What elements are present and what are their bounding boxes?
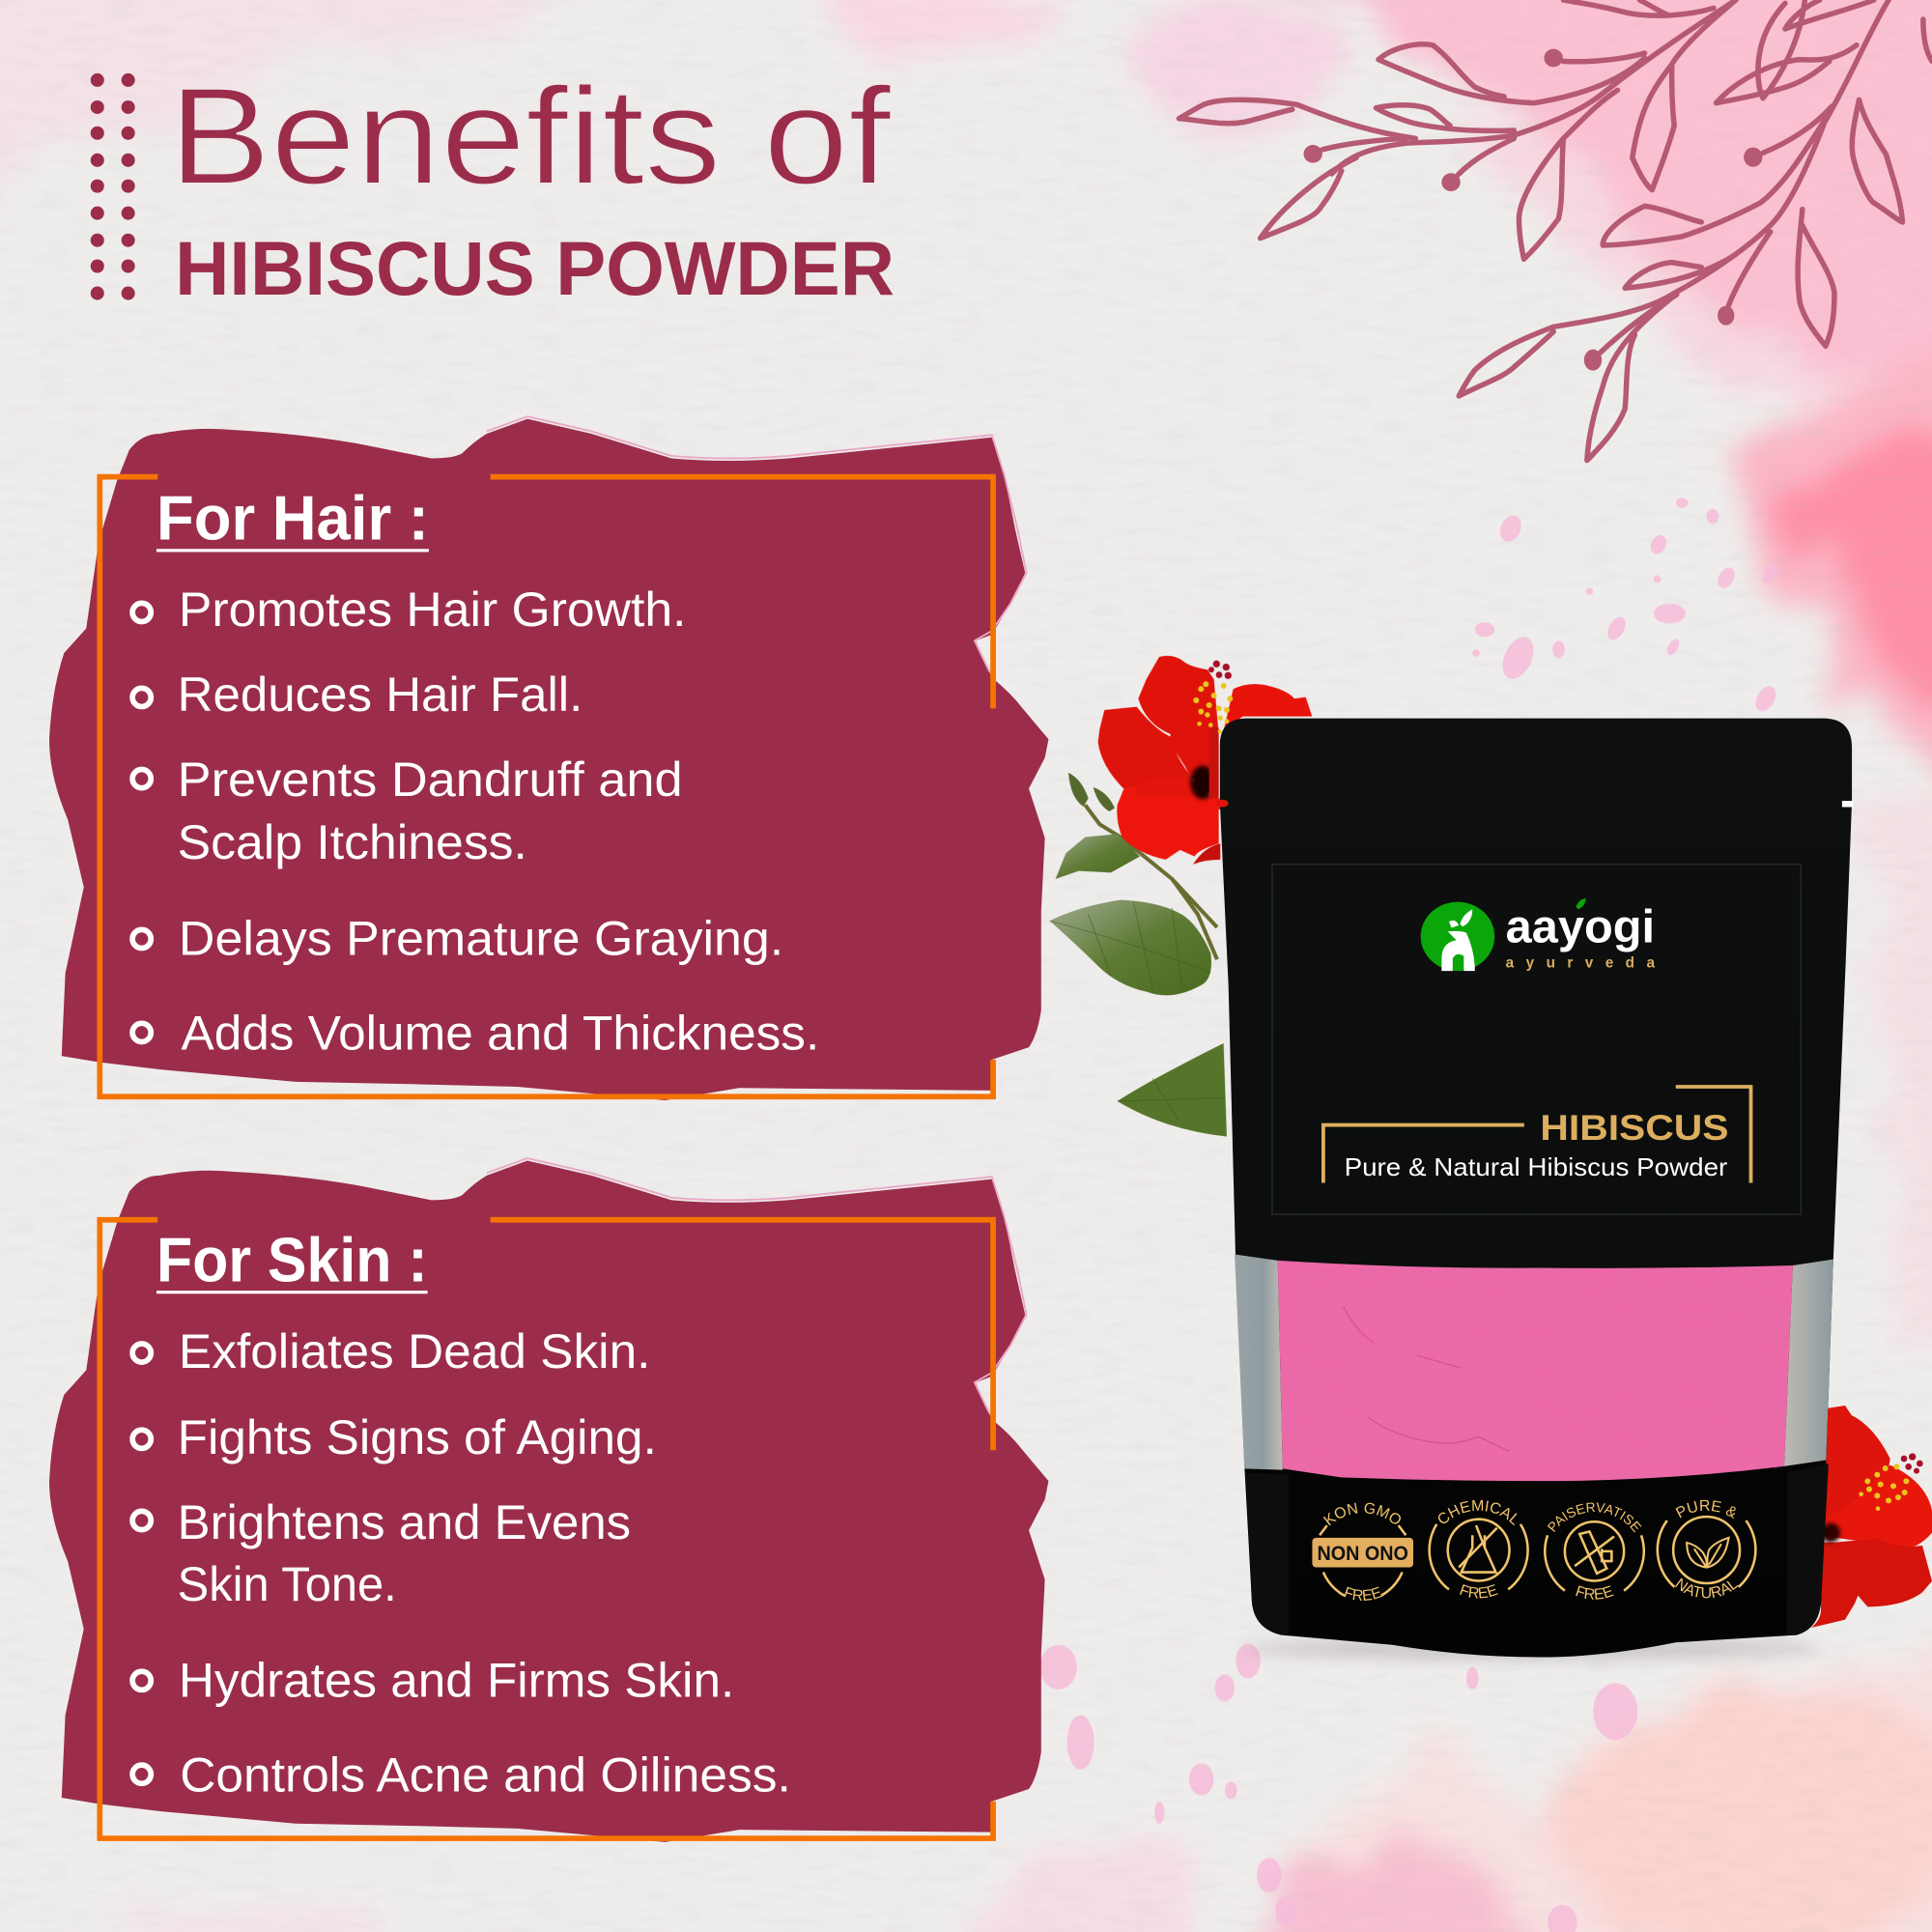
badge: pure and natural: NATURAL bbox=[1675, 1578, 1739, 1598]
pouch shadow bbox=[1244, 1637, 1824, 1660]
skin benefits list: Fights Signs of Aging. bbox=[178, 1410, 657, 1464]
badge: preservative free: FREE bbox=[1576, 1585, 1613, 1600]
panel: for skin bbox=[49, 1158, 1048, 1842]
transparent window sides bbox=[1235, 1254, 1833, 1470]
branch illustration bbox=[1179, 0, 1932, 461]
skin benefits list: Controls Acne and Oiliness. bbox=[180, 1748, 791, 1803]
lower side strips bbox=[1246, 1463, 1829, 1635]
skin benefits list: Skin Tone. bbox=[178, 1557, 397, 1611]
badge: chemical free bbox=[1428, 1499, 1529, 1599]
product name box: Pure & Natural Hibiscus Powder bbox=[1345, 1154, 1728, 1181]
skin benefits list bbox=[132, 1324, 791, 1803]
badge: pure and natural: PURE & bbox=[1675, 1499, 1736, 1519]
badge: pure and natural bbox=[1656, 1499, 1757, 1598]
badge: chemical free: CHEMICAL bbox=[1437, 1499, 1517, 1526]
title: Benefits of bbox=[169, 60, 892, 213]
title bbox=[169, 60, 895, 311]
hair benefits list: Reduces Hair Fall. bbox=[178, 668, 582, 722]
skin benefits list: Hydrates and Firms Skin. bbox=[179, 1653, 734, 1707]
hair benefits list: Prevents Dandruff and bbox=[178, 753, 683, 807]
powder window bbox=[1278, 1261, 1793, 1481]
decorative dot columns bbox=[91, 73, 135, 300]
pouch body bbox=[1220, 719, 1852, 1658]
badge: non gmo bbox=[1312, 1503, 1414, 1602]
badge: non gmo: NON ONO bbox=[1318, 1543, 1408, 1565]
hair benefits list: Promotes Hair Growth. bbox=[179, 582, 686, 637]
product pouch bbox=[1216, 719, 1853, 1658]
hair benefits list: Delays Premature Graying. bbox=[179, 912, 783, 966]
badge: preservative free: PAISERVATISE bbox=[1548, 1502, 1642, 1532]
badge: non gmo: KON GMO bbox=[1323, 1503, 1401, 1526]
badge: preservative free bbox=[1544, 1502, 1646, 1600]
panel: for hair bbox=[49, 416, 1048, 1100]
brand logo: aayogi bbox=[1506, 901, 1655, 953]
brand logo bbox=[1421, 898, 1655, 971]
skin benefits list: Exfoliates Dead Skin. bbox=[179, 1324, 650, 1378]
heading: for hair: For Hair : bbox=[156, 483, 429, 554]
hair benefits list: Adds Volume and Thickness. bbox=[182, 1007, 819, 1061]
orange frame bbox=[99, 477, 993, 1096]
hair benefits list bbox=[132, 582, 819, 1061]
pouch notches bbox=[1216, 800, 1853, 807]
product name box bbox=[1323, 1087, 1750, 1182]
label outline bbox=[1272, 865, 1801, 1214]
brand logo: ayurveda bbox=[1506, 954, 1655, 971]
hibiscus flower, behind pouch right bbox=[1811, 1406, 1932, 1628]
orange frame bbox=[99, 1220, 993, 1838]
badge: chemical free: FREE bbox=[1460, 1584, 1498, 1599]
skin benefits list: Brightens and Evens bbox=[178, 1495, 631, 1549]
hair benefits list: Scalp Itchiness. bbox=[178, 815, 527, 869]
heading: for skin: For Skin : bbox=[156, 1225, 428, 1295]
title: HIBISCUS POWDER bbox=[175, 225, 895, 311]
badge: non gmo: FREE bbox=[1344, 1586, 1382, 1602]
product name box: HIBISCUS bbox=[1540, 1108, 1729, 1148]
hibiscus flower and leaves, upper left of pouch bbox=[1050, 656, 1312, 1137]
